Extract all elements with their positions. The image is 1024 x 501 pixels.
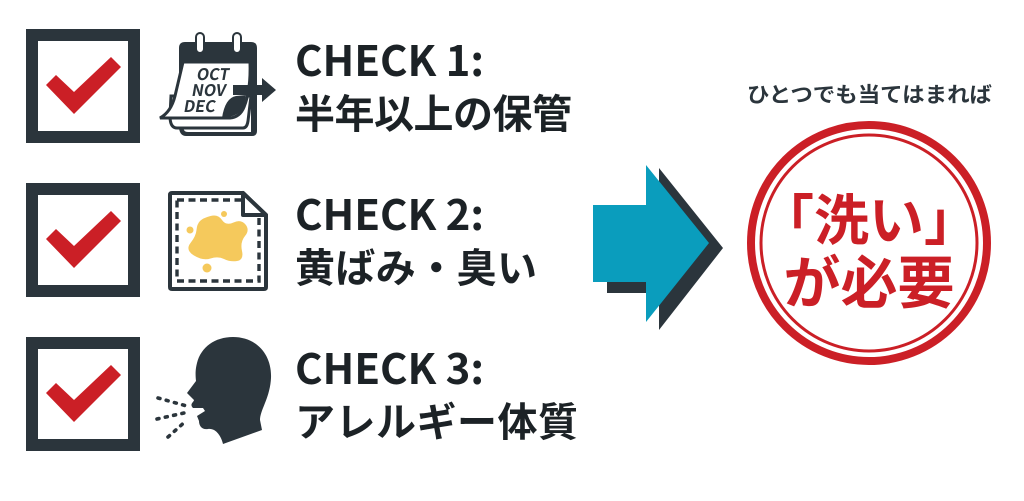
heading: check 3: CHECK 3:	[295, 336, 484, 397]
heading: check 1: 半年以上の保管	[295, 82, 572, 140]
checkbox 3	[32, 343, 134, 445]
stamp: 「洗い」	[759, 176, 979, 256]
icon: head breathing	[157, 337, 271, 444]
heading: check 2: CHECK 2:	[295, 182, 484, 243]
icon: calendar: DEC	[182, 93, 218, 117]
checkbox 1	[32, 35, 134, 137]
heading: check 3: アレルギー体質	[295, 390, 578, 448]
stamp	[751, 125, 987, 361]
heading: check 2	[295, 182, 537, 294]
icon: stained document	[170, 193, 266, 289]
heading: check 3	[295, 336, 578, 448]
stamp: が必要	[784, 238, 954, 320]
heading: check 2: 黄ばみ・臭い	[295, 236, 537, 294]
icon: calendar: NOV	[190, 77, 229, 101]
icon: calendar: OCT	[195, 61, 232, 85]
arrow	[593, 165, 723, 330]
heading: check 1	[295, 28, 572, 140]
heading: check 1: CHECK 1:	[295, 28, 484, 89]
icon: calendar	[160, 33, 276, 136]
checkbox 2	[32, 189, 134, 291]
caption: ひとつでも当てはまれば	[747, 79, 992, 109]
